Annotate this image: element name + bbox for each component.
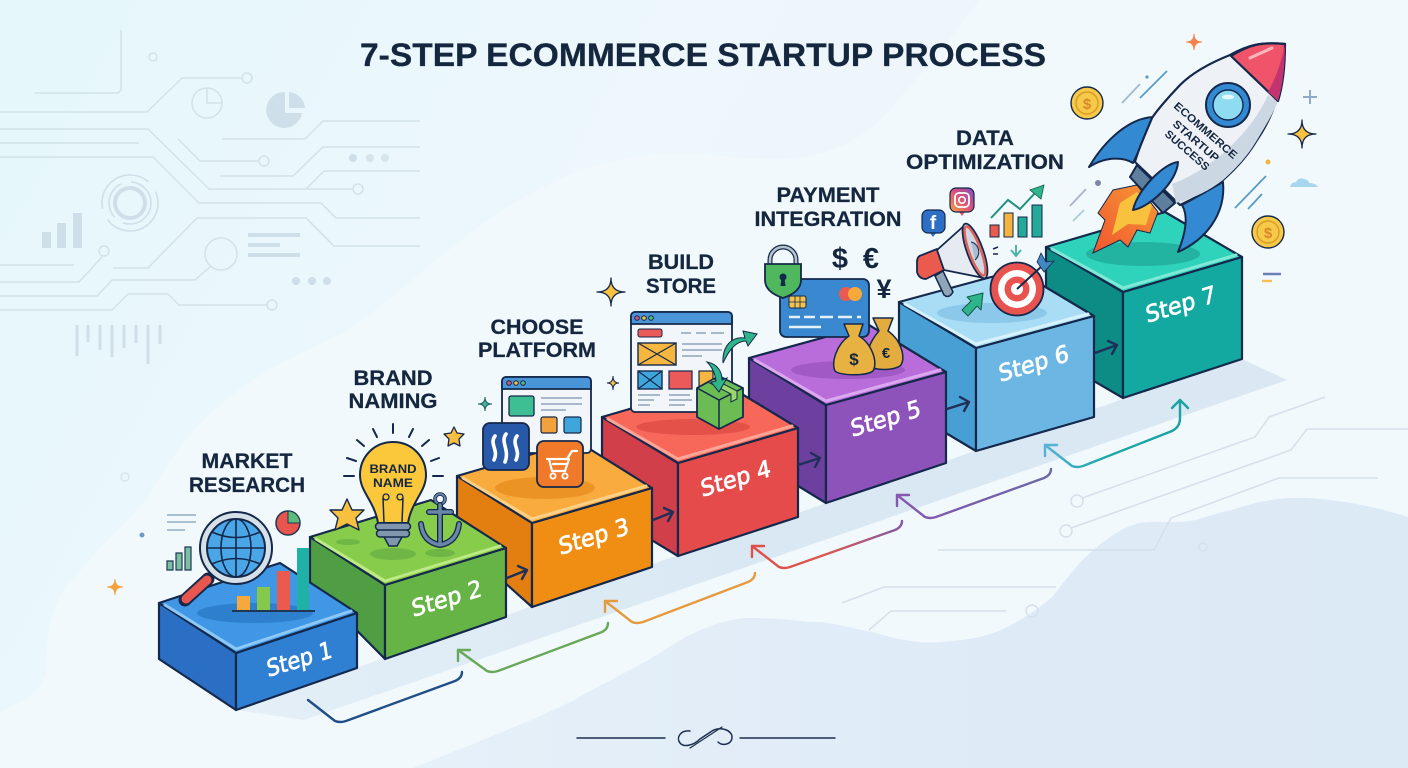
step 2 block: Step 2 [410, 576, 484, 623]
icon: light bulb brand name: NAME [373, 478, 413, 490]
icon: payment card, lock and money: € [882, 345, 891, 362]
label: brand naming: BRAND [354, 367, 432, 390]
label: data optimization [906, 127, 1064, 174]
step 1 block [159, 563, 357, 710]
step 4 block: Step 4 [699, 456, 773, 503]
rocket: SUCCESS [1162, 128, 1211, 173]
label: data optimization: OPTIMIZATION [906, 151, 1064, 174]
step 5 block: Step 5 [849, 396, 923, 443]
circuit pattern: upper left [0, 30, 420, 364]
icon: small sparkle and dot left [107, 473, 144, 595]
label: payment integration: INTEGRATION [754, 208, 902, 231]
label: choose platform: CHOOSE [490, 316, 584, 339]
icon: store page with package [631, 312, 757, 429]
icon: payment card, lock and money: ¥ [876, 274, 892, 304]
icon: sparkle gold [597, 278, 625, 306]
icon: payment card, lock and money [765, 243, 903, 375]
icon: decorative sparkles and coins around rocket [1070, 34, 1318, 281]
step 6 block [899, 270, 1094, 451]
icon: payment card, lock and money: € [863, 243, 879, 275]
step 5 block [749, 325, 946, 503]
label: build store [646, 251, 716, 298]
rocket: STARTUP [1170, 118, 1221, 165]
icon: market research [167, 511, 315, 611]
icon: payment card, lock and money: $ [832, 243, 848, 275]
label: payment integration [754, 184, 902, 231]
step 3 block: Step 3 [557, 514, 631, 561]
icon: platform window with tiles [478, 376, 619, 487]
label: build store: BUILD [648, 251, 714, 274]
label: choose platform [478, 316, 596, 362]
label: build store: STORE [646, 275, 716, 298]
label: choose platform: PLATFORM [478, 339, 596, 362]
circuit pattern: lower right [842, 397, 1408, 630]
rocket: ECOMMERCE [1171, 100, 1239, 162]
connector arrows between blocks [507, 341, 1117, 579]
floor shadow band [236, 358, 1287, 720]
label: market research: MARKET [202, 450, 293, 473]
icon: light bulb brand name [330, 424, 464, 560]
label: brand naming [348, 367, 438, 413]
progress arrows below blocks [308, 400, 1188, 722]
step 7 block: Step 7 [1144, 282, 1218, 329]
label: payment integration: PAYMENT [776, 184, 880, 207]
label: market research [189, 450, 305, 497]
step 2 block [310, 500, 506, 659]
step 7 block [1046, 212, 1242, 398]
icon: decorative sparkles and coins around rocket: $ [1083, 96, 1092, 113]
step 4 block [602, 382, 798, 556]
ornament divider [577, 727, 835, 748]
icon: data optimization marketing cluster: f [930, 213, 937, 234]
icon: light bulb brand name: BRAND [370, 464, 416, 476]
label: data optimization: DATA [956, 127, 1014, 150]
label: brand naming: NAMING [348, 390, 438, 413]
icon: decorative sparkles and coins around rocket: $ [1264, 225, 1273, 242]
rocket [1089, 43, 1285, 253]
title: 7-STEP ECOMMERCE STARTUP PROCESS [360, 37, 1046, 73]
icon: payment card, lock and money: $ [849, 350, 859, 369]
step 1 block: Step 1 [265, 637, 334, 683]
step 3 block [457, 441, 652, 607]
step 6 block: Step 6 [997, 341, 1071, 388]
icon: data optimization marketing cluster [917, 185, 1054, 316]
label: market research: RESEARCH [189, 474, 305, 497]
